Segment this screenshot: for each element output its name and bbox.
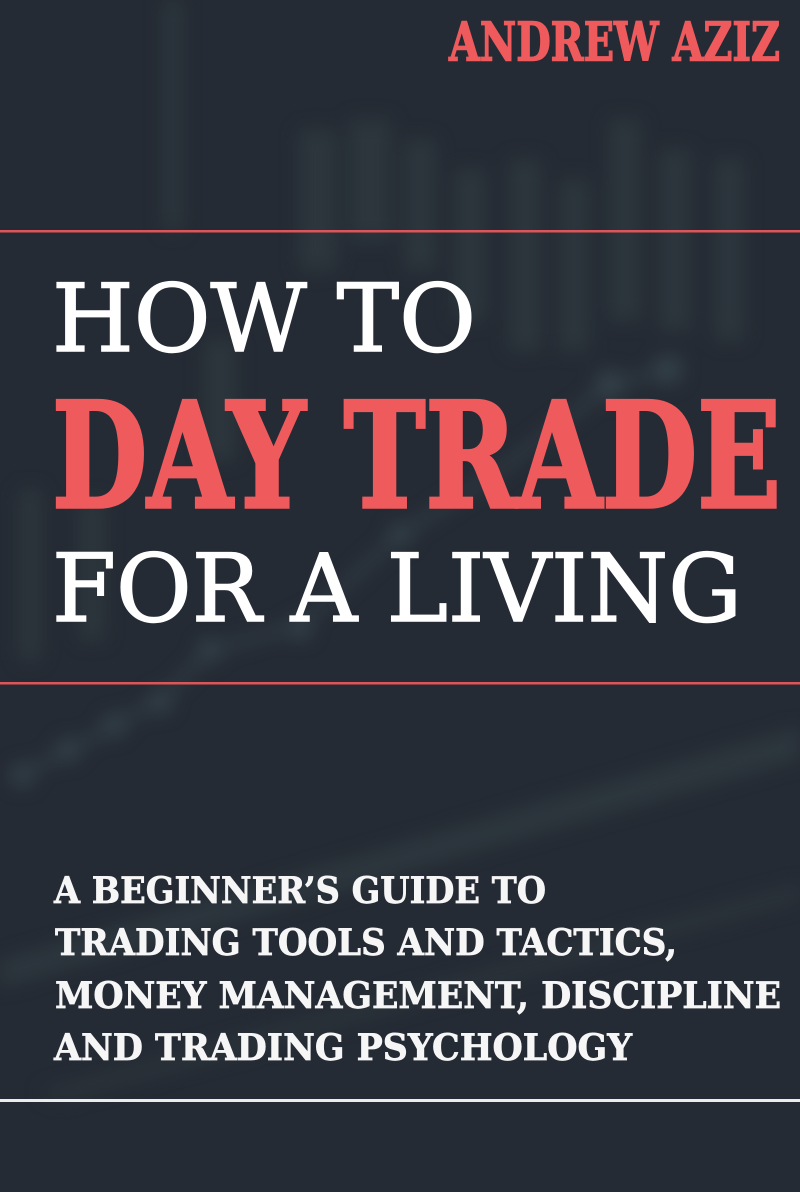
- title line: for a living: FOR A LIVING: [52, 535, 742, 644]
- subtitle: A BEGINNER’S GUIDE TO: [53, 870, 546, 912]
- subtitle: TRADING TOOLS AND TACTICS,: [55, 922, 677, 964]
- title line: how to: HOW TO: [52, 265, 476, 374]
- subtitle: [53, 870, 781, 1069]
- subtitle: AND TRADING PSYCHOLOGY: [53, 1027, 633, 1069]
- bottom rule: [0, 1099, 800, 1102]
- top rule: [0, 230, 800, 232]
- subtitle: MONEY MANAGEMENT, DISCIPLINE: [55, 975, 781, 1017]
- middle rule: [0, 682, 800, 684]
